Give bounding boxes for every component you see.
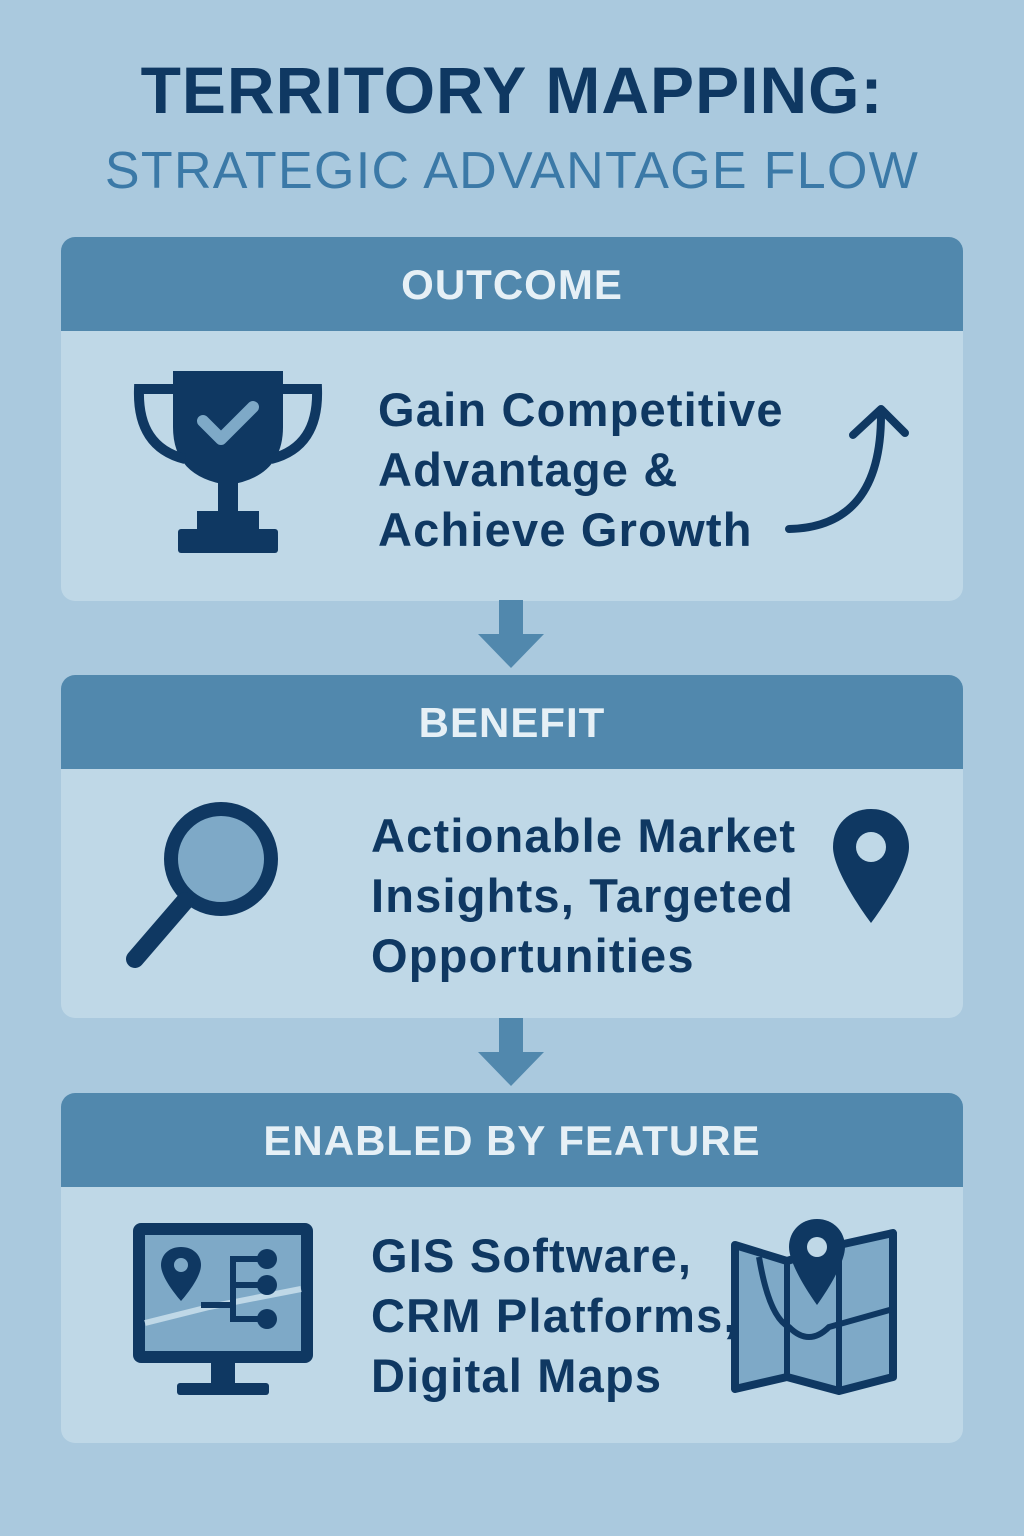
icon: trophy xyxy=(134,371,322,553)
title: TERRITORY MAPPING: xyxy=(141,53,883,127)
icon: monitor xyxy=(133,1223,313,1395)
heading: outcome: OUTCOME xyxy=(401,261,623,308)
text: benefit xyxy=(371,809,796,982)
heading: feature: ENABLED BY FEATURE xyxy=(263,1117,761,1164)
text: benefit: Insights, Targeted xyxy=(371,869,794,922)
text: benefit: Actionable Market xyxy=(371,809,796,862)
text: feature: GIS Software, xyxy=(371,1229,692,1282)
arrow: down 2 xyxy=(478,1018,544,1086)
heading: benefit: BENEFIT xyxy=(419,699,605,746)
text: outcome: Advantage & xyxy=(378,443,678,496)
icon: growth arrow xyxy=(785,405,909,533)
panel: outcome xyxy=(61,237,963,601)
panel: feature xyxy=(61,1093,963,1443)
icon: location pin xyxy=(833,809,909,923)
icon: folded map xyxy=(731,1219,897,1395)
text: feature xyxy=(371,1229,738,1402)
text: benefit: Opportunities xyxy=(371,929,695,982)
text: outcome: Achieve Growth xyxy=(378,503,753,556)
text: feature: CRM Platforms, xyxy=(371,1289,738,1342)
icon: magnifier xyxy=(126,802,278,968)
text: outcome: Gain Competitive xyxy=(378,383,784,436)
subtitle: STRATEGIC ADVANTAGE FLOW xyxy=(105,142,919,200)
arrow: down 1 xyxy=(478,600,544,668)
heading: outcome xyxy=(61,237,963,331)
text: outcome xyxy=(378,383,784,556)
text: feature: Digital Maps xyxy=(371,1349,662,1402)
panel: benefit xyxy=(61,675,963,1018)
heading: benefit xyxy=(61,675,963,769)
heading: feature xyxy=(61,1093,963,1187)
